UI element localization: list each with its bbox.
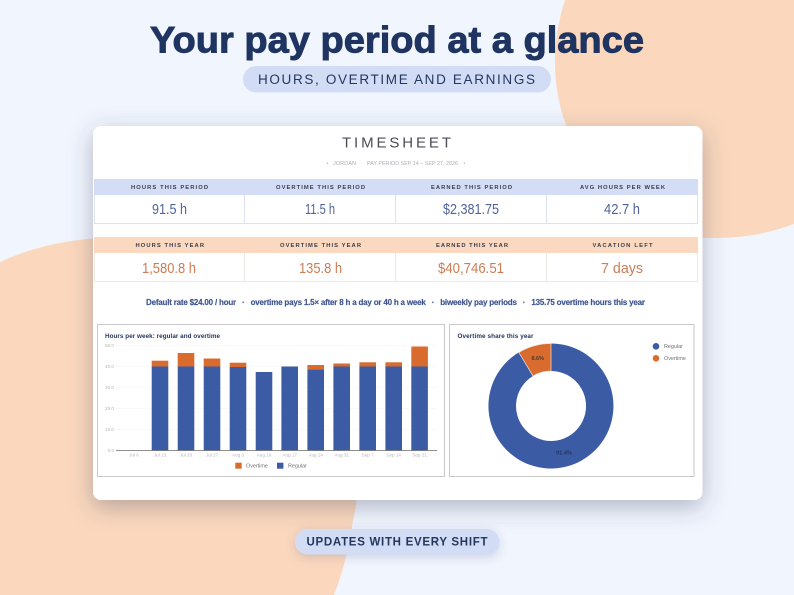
regular percentage: 91.4% <box>556 451 572 457</box>
chart title: Hours per week: regular and overtime <box>105 333 220 340</box>
rate note: Default rate $24.00 / hour · overtime pays 1.5× after 8 h a day or 40 h a week · biweekly pay periods · 135.75 overtime hours this year <box>146 298 645 307</box>
x axis labels: Sep 21 <box>412 452 427 458</box>
donut: regular slice <box>488 344 613 468</box>
period stats table: 91.5 h <box>152 201 187 218</box>
pay period line: PAY PERIOD SEP 14 – SEP 27, 2026 <box>367 161 458 167</box>
chart legend: Regular <box>288 464 307 470</box>
baseline <box>116 450 437 452</box>
chart legend: Overtime <box>246 464 268 470</box>
footer pill <box>295 529 500 554</box>
donut legend: Regular <box>664 344 683 350</box>
title: Your pay period at a glance <box>150 20 644 60</box>
year stats table: HOURS THIS YEAR <box>136 243 205 249</box>
y axis labels <box>105 343 114 453</box>
panel: donut chart <box>450 324 694 476</box>
y axis labels: 30.0 <box>105 385 114 390</box>
period stats table: HOURS THIS PERIOD <box>131 185 208 191</box>
footer pill: UPDATES WITH EVERY SHIFT <box>306 537 488 549</box>
donut: overtime slice <box>519 343 551 376</box>
x axis labels: Sep 14 <box>386 452 401 458</box>
overtime percentage: 8.6% <box>532 356 544 362</box>
x axis labels: Jul 27 <box>206 452 219 458</box>
chart legend <box>235 463 307 470</box>
blob: top right peach <box>555 0 794 238</box>
pay period line: • <box>464 161 466 167</box>
y axis labels: 50.0 <box>105 343 114 348</box>
pay period line: JORDAN <box>333 161 356 167</box>
year stats table <box>94 237 698 282</box>
period stats table <box>94 179 698 224</box>
x axis labels: Jul 6 <box>129 452 139 458</box>
x axis labels: Aug 3 <box>232 452 244 458</box>
y axis labels: 0.0 <box>108 448 114 453</box>
period stats table: 11.5 h <box>305 201 335 218</box>
x axis labels: Sep 7 <box>362 452 374 458</box>
period stats table: AVG HOURS PER WEEK <box>580 185 666 191</box>
x axis labels: Jul 13 <box>154 452 167 458</box>
year stats table: 1,580.8 h <box>142 260 196 277</box>
regular hour bars <box>152 366 428 450</box>
x axis labels: Aug 24 <box>308 452 323 458</box>
x axis labels: Aug 10 <box>257 452 272 458</box>
pay period line: · <box>361 161 363 167</box>
sheet heading: TIMESHEET <box>342 134 451 152</box>
pay period line <box>326 161 466 167</box>
x axis labels <box>129 452 427 458</box>
year stats table: $40,746.51 <box>438 260 504 277</box>
y axis labels: 20.0 <box>105 406 114 411</box>
timesheet card <box>93 126 702 500</box>
year stats table: 135.8 h <box>299 260 342 277</box>
period stats table: EARNED THIS PERIOD <box>431 185 512 191</box>
x axis labels: Jul 20 <box>180 452 193 458</box>
pay period line: • <box>326 161 328 167</box>
year stats table: OVERTIME THIS YEAR <box>280 243 362 249</box>
donut title: Overtime share this year <box>458 333 534 340</box>
x axis labels: Aug 31 <box>334 452 349 458</box>
y axis labels: 10.0 <box>105 427 114 432</box>
blob: bottom left peach <box>0 237 359 595</box>
year stats table: EARNED THIS YEAR <box>436 243 509 249</box>
x axis labels: Aug 17 <box>282 452 297 458</box>
overtime bars <box>152 346 428 369</box>
period stats table: 42.7 h <box>604 201 640 218</box>
year stats table: VACATION LEFT <box>592 243 653 249</box>
year stats table: 7 days <box>601 260 643 277</box>
period stats table: $2,381.75 <box>443 201 499 218</box>
subtitle pill <box>243 66 551 92</box>
donut legend: Overtime <box>664 356 686 362</box>
grid lines <box>116 345 437 429</box>
y axis labels: 40.0 <box>105 364 114 369</box>
period stats table: OVERTIME THIS PERIOD <box>276 185 365 191</box>
subtitle pill: HOURS, OVERTIME AND EARNINGS <box>258 72 535 87</box>
donut legend <box>653 343 686 362</box>
panel: stacked bar chart <box>98 324 444 476</box>
